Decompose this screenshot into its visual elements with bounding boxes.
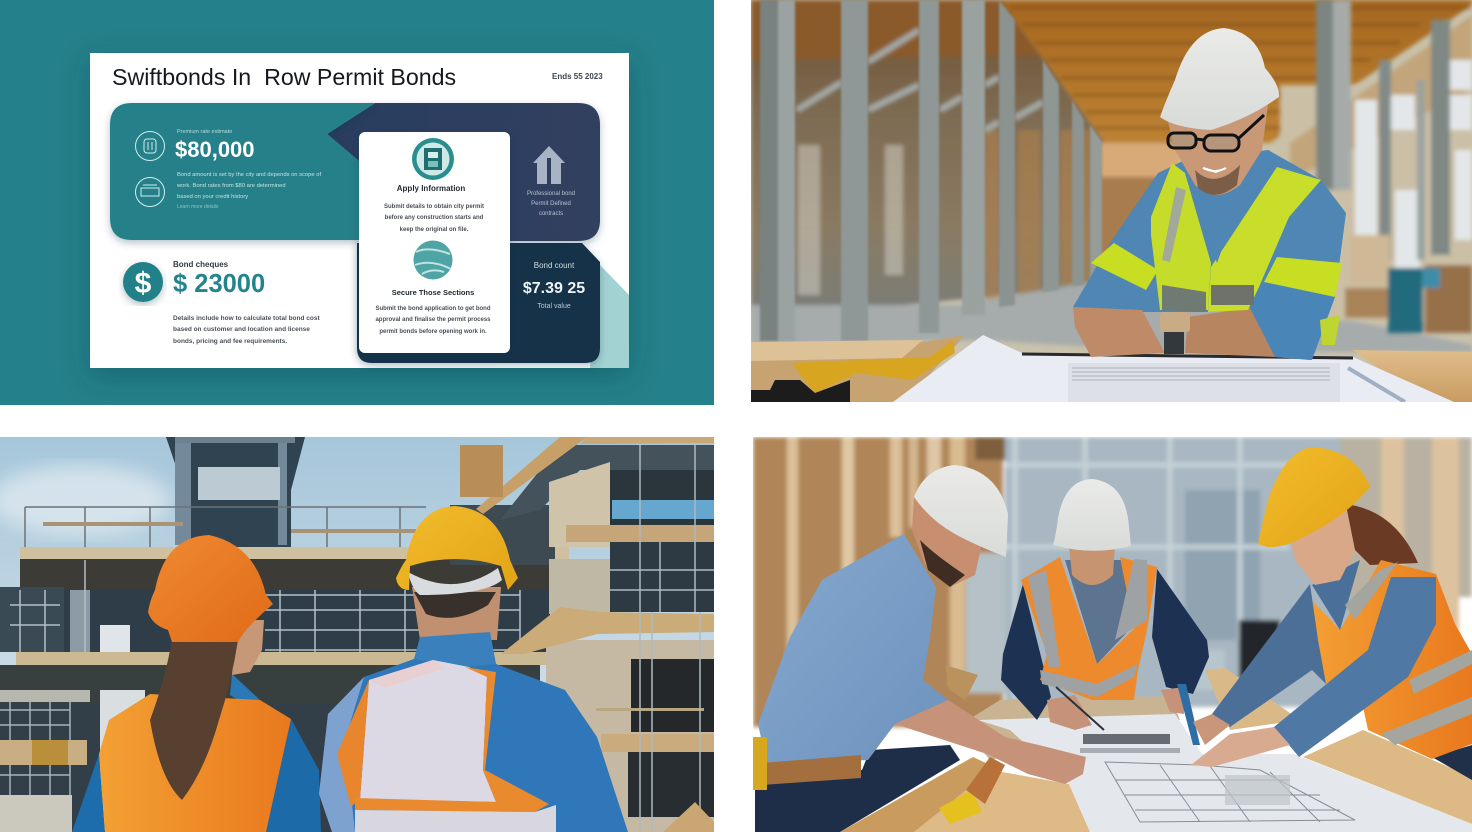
collar [414,632,496,667]
blue pen [1177,684,1200,745]
sleeve bands [1091,243,1158,290]
icon: house with caption: Permit Defined [531,201,571,207]
vest orange bands [337,680,369,807]
dark lower block: Total value [537,303,571,310]
face [1069,545,1115,585]
icon: bond badge [136,178,164,206]
vest [1021,557,1157,700]
glasses [1168,115,1264,151]
panel: permit bonds infographic slide [0,0,714,405]
icon: building badge [136,132,164,160]
white hard hat [1053,479,1131,551]
dollar cost block [123,260,320,345]
reflective strips [1028,559,1147,697]
shirt [1065,560,1134,664]
vest white panel [360,660,496,802]
worker: engineer in hi-vis vest [1073,28,1346,360]
face and beard [1167,105,1268,195]
icon: house with caption [527,146,575,217]
forearm [1185,308,1275,357]
orange hard hat [148,535,273,642]
white information card: Submit details to obtain city permit [384,204,484,210]
blueprint sheet [893,335,1454,402]
vest right panel [1208,167,1321,312]
card heading one: Apply Information [397,184,465,193]
white hard hat [914,465,1008,557]
icon: dollar coin [123,262,163,302]
tower [166,437,305,547]
white hard hat [1160,28,1279,130]
cost description: Details include how to calculate total bond cost [173,315,320,322]
amount label: Premium rate estimate [177,129,232,135]
worker: man in yellow hard hat [319,506,628,832]
panel: three workers studying blueprints [753,437,1472,832]
forearm [895,700,1086,784]
description: based on your credit history [177,194,248,200]
main structure [0,547,569,832]
white information card [359,132,510,353]
work table [751,335,1472,402]
icon: map badge [414,240,452,280]
left columns [760,0,1102,341]
yellow tape measure tool [939,757,1005,824]
face [1287,500,1355,585]
head and neck [412,587,501,640]
face and beard [912,497,985,587]
trousers [755,745,960,832]
worker: right woman in yellow hard hat [1191,447,1472,780]
yellow tool pouch [753,737,767,790]
cost description: bonds, pricing and fee requirements. [173,338,287,345]
hand [1073,307,1165,357]
cost description [173,315,320,345]
icon: house with caption: Professional bond [527,191,575,197]
worker: centre man in orange vest [1001,479,1209,730]
reflective bands [1162,187,1254,312]
cost amount: $ 23000 [173,270,265,298]
sleeves [1001,584,1051,720]
cost description: based on customer and location and license [173,326,310,333]
right arm [1274,577,1436,757]
white sweatband [408,568,502,595]
card heading two: Secure Those Sections [392,288,474,297]
teal summary panel [110,103,375,240]
icon: house with caption: contracts [539,211,563,217]
icon: dollar coin: $ [135,267,152,300]
blurred timber and glass background [753,437,1472,727]
wood stack at left [0,740,87,765]
lower sleeves [1248,282,1335,360]
amount: $80,000 [175,137,255,162]
face side [232,620,264,675]
description: Learn more details [177,204,219,210]
vest [1306,560,1472,759]
panel: two workers viewing building site [0,437,718,832]
white information card: approval and finalise the permit process [375,317,491,323]
blurred hall background [751,0,1472,352]
hands [1191,727,1290,767]
rooftop scaffold [25,507,426,547]
collar and neck [1185,150,1270,263]
panel: engineer reviewing plans in timber-framed building [751,0,1472,402]
left arm [1212,584,1326,727]
yellow clamp [792,340,955,393]
blue sleeves [72,754,105,832]
slide card [90,53,629,368]
white information card: before any construction starts and [385,215,484,221]
vest underside [1320,315,1340,345]
trousers [1432,745,1472,780]
description: work. Bond rates from $80 are determined [176,183,286,189]
slide title: Swiftbonds In Row Permit Bonds [112,64,456,90]
belt [762,755,861,785]
dark lower block [357,243,600,363]
white information card: keep the original on file. [400,227,469,233]
shirt [758,534,948,765]
wristwatch [1160,312,1190,354]
worker: left man in blue shirt [753,465,1086,832]
right side structure [1280,0,1472,333]
navy upper block [327,103,600,241]
reflective bands [1345,562,1472,745]
dark lower block: $7.39 25 [523,280,585,297]
blueprint sheet [978,714,1472,832]
description: Bond amount is set by the city and depends on scope of [177,172,321,178]
white information card: permit bonds before opening work in. [379,329,487,335]
shoulders [319,659,628,832]
vest left panel [1151,163,1211,310]
right timber wing [450,437,718,832]
lower block price: Bond count [534,261,575,270]
table with blueprint [840,665,1472,832]
collar shirt [1312,560,1360,630]
icon: document badge [412,138,454,180]
pale corner triangle [590,265,629,368]
white information card: Submit the bond application to get bond [376,306,491,312]
cost label: Bond cheques [173,260,229,269]
yellow hard hat [1258,447,1370,547]
vest [99,694,291,832]
hands [1047,695,1092,730]
worker: woman in orange vest [72,535,321,832]
ponytail [150,640,238,800]
description [176,172,321,210]
shirt torso and arms [1073,150,1346,360]
slide date: Ends 55 2023 [552,72,603,81]
hair [1345,504,1418,565]
yellow hard hat [396,506,518,590]
